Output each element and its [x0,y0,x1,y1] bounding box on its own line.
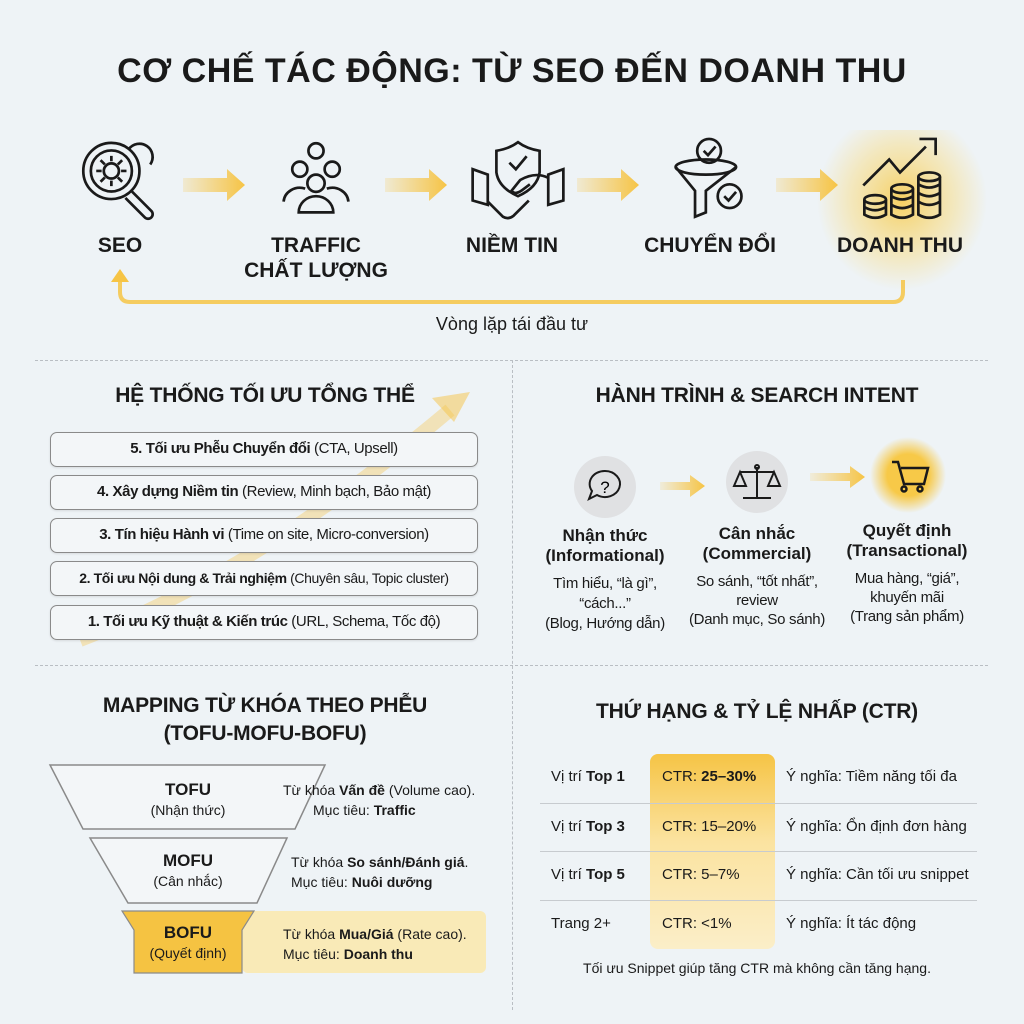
layer 1 [50,605,478,640]
background growth arrow [80,392,470,646]
flow diagram: CHẤT LƯỢNG [244,259,388,282]
loop arrow [120,278,903,302]
row top5 [540,851,977,899]
icon: cart [870,437,946,513]
panel: optimization system [50,382,478,646]
step: commercial: review [736,592,778,609]
icon: question: ? [600,478,610,497]
flow diagram: NIỀM TIN [466,234,558,257]
icon: revenue coins [863,139,940,218]
panel: keyword funnel mapping: Mục tiêu: Traffic [313,802,416,818]
row top3: CTR: 15–20% [662,818,756,835]
flow diagram: SEO [98,234,142,257]
layer 5 [50,432,478,467]
BOFU [149,923,227,961]
step: informational: (Blog, Hướng dẫn) [545,615,665,632]
row top1: Ý nghĩa: Tiềm năng tối đa [786,768,957,785]
row page2: Trang 2+ [551,915,611,932]
row top5: Ý nghĩa: Cần tối ưu snippet [786,866,969,883]
layer 2: 2. Tối ưu Nội dung & Trải nghiệm (Chuyên sâu, Topic cluster) [79,570,449,586]
icon: handshake shield [473,142,563,218]
flow diagram: DOANH THU [837,234,963,257]
step: transactional: (Transactional) [847,541,967,560]
dividers [35,360,988,361]
MOFU [153,851,223,889]
panel: keyword funnel mapping: Mục tiêu: Nuôi dưỡng [291,874,432,890]
MOFU: MOFU [163,851,213,870]
panel: keyword funnel mapping: Mục tiêu: Doanh thu [283,946,413,962]
arrow [660,475,705,497]
step: informational [545,526,665,632]
row top5: CTR: 5–7% [662,866,740,883]
row top1: CTR: 25–30% [662,768,756,785]
row top5: Vị trí Top 5 [551,866,625,883]
step: informational: “cách...” [579,595,631,612]
arrows [183,169,838,201]
BOFU: BOFU [164,923,212,942]
panel: keyword funnel mapping: Từ khóa Mua/Giá (Rate cao). [283,926,467,942]
footnote: Tối ưu Snippet giúp tăng CTR mà không cần tăng hạng. [583,960,931,976]
layer 4: 4. Xây dựng Niềm tin (Review, Minh bạch, Bảo mật) [97,483,431,500]
BOFU: (Quyết định) [149,945,227,961]
panel: keyword funnel mapping [48,692,486,974]
row page2 [540,900,977,948]
flow diagram [82,130,982,304]
step: transactional: khuyến mãi [870,589,944,606]
panel: keyword funnel mapping: Từ khóa Vấn đề (Volume cao). [283,782,475,798]
icon: scale [726,451,788,513]
step: transactional: (Trang sản phẩm) [850,608,964,625]
flow diagram: CHUYỂN ĐỔI [644,234,776,257]
heading [103,692,427,745]
TOFU [151,780,225,818]
step: commercial: (Commercial) [703,544,811,563]
panel: journey & search intent [545,383,967,632]
icon: people [284,143,348,212]
funnel graphic [48,764,486,974]
row page2: CTR: <1% [662,915,732,932]
loop caption: Vòng lặp tái đầu tư [436,314,588,334]
title: CƠ CHẾ TÁC ĐỘNG: TỪ SEO ĐẾN DOANH THU [117,52,907,90]
TOFU: (Nhận thức) [151,802,225,818]
icon: seo magnifier gear [83,143,153,219]
step: informational: Tìm hiểu, “là gì”, [553,575,657,592]
arrow [810,466,865,488]
step: commercial: (Danh mục, So sánh) [689,611,825,628]
heading: HỆ THỐNG TỐI ƯU TỔNG THỂ [115,384,415,407]
step: commercial: Cân nhắc [719,524,795,543]
layer 3 [50,518,478,553]
MOFU: (Cân nhắc) [153,873,223,889]
layer 2 [50,561,478,596]
icon: funnel [676,139,741,217]
step: transactional [847,521,967,625]
row page2: Ý nghĩa: Ít tác động [786,915,916,932]
CTR highlight column [650,754,775,949]
glow behind revenue [817,110,987,290]
step: commercial: So sánh, “tốt nhất”, [696,573,818,590]
step: informational: (Informational) [546,546,664,565]
icon: question [574,456,636,518]
flow diagram: TRAFFIC [271,234,361,257]
layer 5: 5. Tối ưu Phễu Chuyển đổi (CTA, Upsell) [130,440,398,457]
step: commercial [689,524,825,628]
panel: keyword funnel mapping: Từ khóa So sánh/Đánh giá. [291,854,468,870]
row top1: Vị trí Top 1 [551,768,625,785]
step: transactional: Mua hàng, “giá”, [855,570,959,587]
heading: (TOFU-MOFU-BOFU) [164,722,366,745]
row top3: Ý nghĩa: Ổn định đơn hàng [786,818,967,835]
row top3: Vị trí Top 3 [551,818,625,835]
CTR table [540,768,977,932]
step: informational: Nhận thức [562,526,648,545]
row top1 [551,768,957,785]
layer 4 [50,475,478,510]
layer 1: 1. Tối ưu Kỹ thuật & Kiến trúc (URL, Schema, Tốc độ) [88,613,440,630]
row top3 [540,803,977,851]
heading: MAPPING TỪ KHÓA THEO PHỄU [103,694,427,717]
TOFU: TOFU [165,780,211,799]
layer 3: 3. Tín hiệu Hành vi (Time on site, Micro-conversion) [99,526,429,543]
heading: THỨ HẠNG & TỶ LỆ NHẤP (CTR) [596,700,918,723]
step: transactional: Quyết định [863,521,951,540]
heading: HÀNH TRÌNH & SEARCH INTENT [596,384,918,407]
